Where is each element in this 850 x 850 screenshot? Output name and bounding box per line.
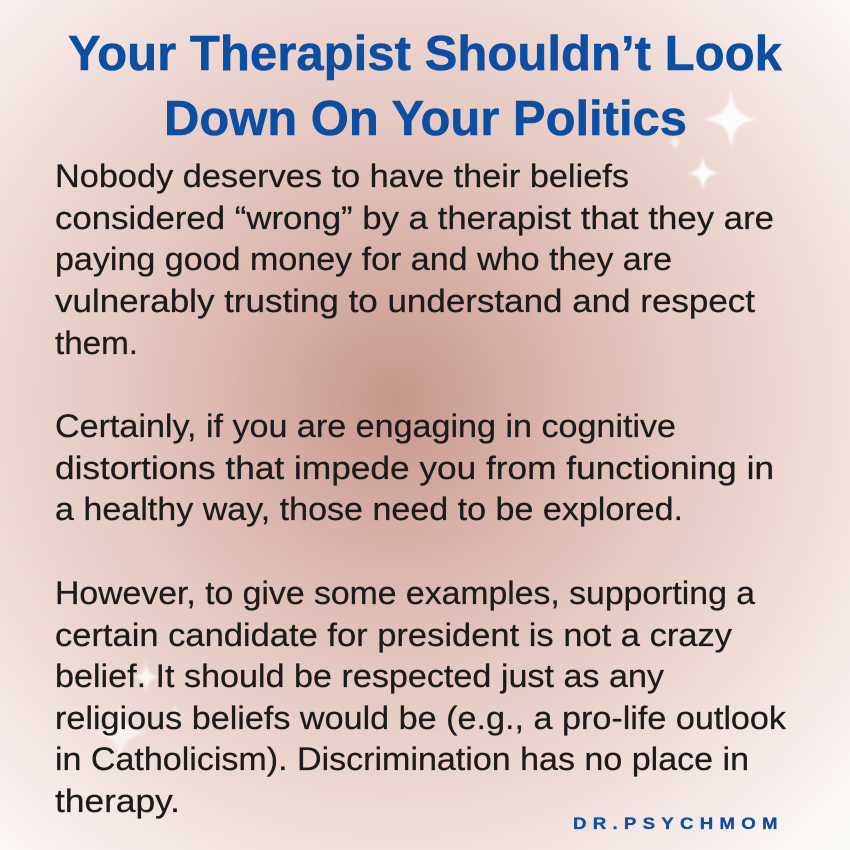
- text block: first paragraph: Nobody deserves to have their beliefs: [55, 158, 629, 194]
- icon: sparkle lower left: [96, 702, 146, 762]
- text block: first paragraph: paying good money for and who they are: [55, 241, 672, 277]
- text block: first paragraph: [55, 158, 774, 361]
- text block: third paragraph: therapy.: [55, 783, 180, 819]
- text block: second paragraph: a healthy way, those need to be explored.: [55, 491, 683, 527]
- brand signature: DR.PSYCHMOM: [573, 814, 778, 833]
- text block: first paragraph: vulnerably trusting to understand and respect: [55, 283, 755, 319]
- text block: third paragraph: However, to give some examples, supporting a: [55, 575, 755, 611]
- title: [68, 27, 783, 146]
- text block: first paragraph: considered “wrong” by a therapist that they are: [55, 200, 774, 236]
- text block: third paragraph: belief. It should be respected just as any: [55, 658, 664, 694]
- icon: small sparkle: [687, 155, 720, 191]
- icon: large sparkle: [702, 88, 758, 150]
- icon: sparkle behind title: [668, 134, 682, 151]
- text block: second paragraph: Certainly, if you are engaging in cognitive: [55, 408, 676, 444]
- text block: second paragraph: [55, 408, 774, 527]
- text block: third paragraph: in Catholicism). Discrimination has no place in: [55, 741, 749, 777]
- text block: third paragraph: religious beliefs would be (e.g., a pro-life outlook: [55, 700, 787, 736]
- icon: sparkle near religious: [165, 703, 186, 728]
- text block: third paragraph: certain candidate for president is not a crazy: [55, 617, 732, 653]
- text block: first paragraph: them.: [55, 325, 138, 361]
- title: Your Therapist Shouldn’t Look: [68, 27, 783, 81]
- title: Down On Your Politics: [164, 92, 687, 146]
- icon: sparkle behind belief: [134, 660, 160, 695]
- text block: third paragraph: [55, 575, 787, 819]
- text block: second paragraph: distortions that impede you from functioning in: [55, 450, 774, 486]
